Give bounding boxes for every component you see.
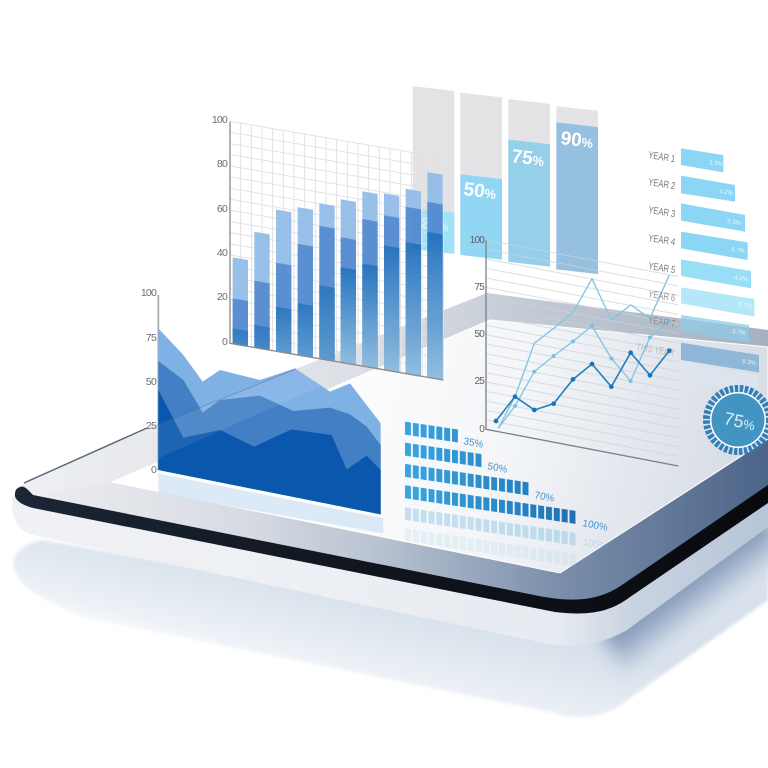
year labels: THIS YEAR xyxy=(636,342,675,359)
mid series xyxy=(498,320,671,428)
year labels: YEAR 1 xyxy=(648,150,676,165)
upper bezel xyxy=(20,293,768,495)
area chart axis labels: 75 xyxy=(146,332,157,344)
bar chart axis labels: 100 xyxy=(212,114,228,126)
area chart axis labels: 25 xyxy=(146,420,157,432)
black edge xyxy=(15,485,768,613)
progress labels xyxy=(462,436,609,553)
values inside bars: 4.2% xyxy=(734,275,749,283)
bar chart axis labels: 20 xyxy=(217,291,228,303)
dark series xyxy=(494,348,672,423)
line chart axis labels: 75 xyxy=(474,282,485,293)
yearly horizontal bars xyxy=(636,148,759,393)
line chart axis labels: 0 xyxy=(479,424,485,435)
area chart axis labels: 50 xyxy=(146,376,157,388)
progress labels: 35% xyxy=(462,436,484,451)
bar chart axis labels: 80 xyxy=(217,158,228,170)
area chart axis labels: 100 xyxy=(141,287,157,299)
segmented progress bars xyxy=(405,422,609,567)
year labels xyxy=(636,150,676,359)
year labels: YEAR 3 xyxy=(648,205,676,220)
values inside bars: 5.7% xyxy=(738,302,753,310)
progress labels: 100% xyxy=(581,518,609,534)
line chart xyxy=(470,235,678,466)
tablet reflection xyxy=(13,527,768,718)
year labels: YEAR 2 xyxy=(648,177,676,192)
values inside bars: 6.7% xyxy=(731,247,746,255)
line chart axis labels: 25 xyxy=(474,376,485,387)
progress labels: 50% xyxy=(486,461,508,476)
area chart axis labels xyxy=(141,287,157,476)
values inside bars: 6.3% xyxy=(742,359,757,367)
progress labels: 70% xyxy=(533,490,555,505)
area chart xyxy=(140,287,390,533)
year labels: YEAR 4 xyxy=(648,233,676,248)
bar chart axis labels: 60 xyxy=(217,203,228,215)
bar chart axis labels xyxy=(212,114,228,348)
screen xyxy=(112,320,768,573)
circular gauge 75%: 75% xyxy=(722,408,758,435)
values inside bars xyxy=(709,160,757,367)
percent columns xyxy=(413,86,598,274)
percent labels: 75% xyxy=(510,146,546,171)
tablet xyxy=(12,293,768,646)
percent labels: 90% xyxy=(559,128,595,153)
year labels: YEAR 6 xyxy=(648,289,676,304)
top edge line xyxy=(24,428,147,483)
area chart axis labels: 0 xyxy=(151,464,157,476)
percent labels: 25% xyxy=(420,215,450,235)
light series xyxy=(498,275,669,428)
values inside bars: 4.2% xyxy=(719,189,734,197)
tablet body xyxy=(12,487,768,646)
year labels: YEAR 7 xyxy=(648,315,676,330)
percent labels xyxy=(420,128,595,235)
line chart axis labels xyxy=(470,235,485,435)
line chart axis labels: 50 xyxy=(474,329,485,340)
circular gauge 75% xyxy=(706,388,768,452)
bar chart axis labels: 0 xyxy=(222,336,228,348)
values inside bars: 1.3% xyxy=(709,160,724,168)
values inside bars: 5.3% xyxy=(727,219,742,227)
bar chart axis labels: 40 xyxy=(217,247,228,259)
year labels: YEAR 5 xyxy=(648,261,676,276)
stacked bar chart xyxy=(212,114,443,381)
values inside bars: 5.7% xyxy=(732,329,747,337)
progress labels: 100% xyxy=(581,537,609,553)
chart reflection xyxy=(158,473,383,533)
percent labels: 50% xyxy=(462,179,498,204)
line chart axis labels: 100 xyxy=(470,235,485,246)
lower bezel xyxy=(33,439,768,603)
